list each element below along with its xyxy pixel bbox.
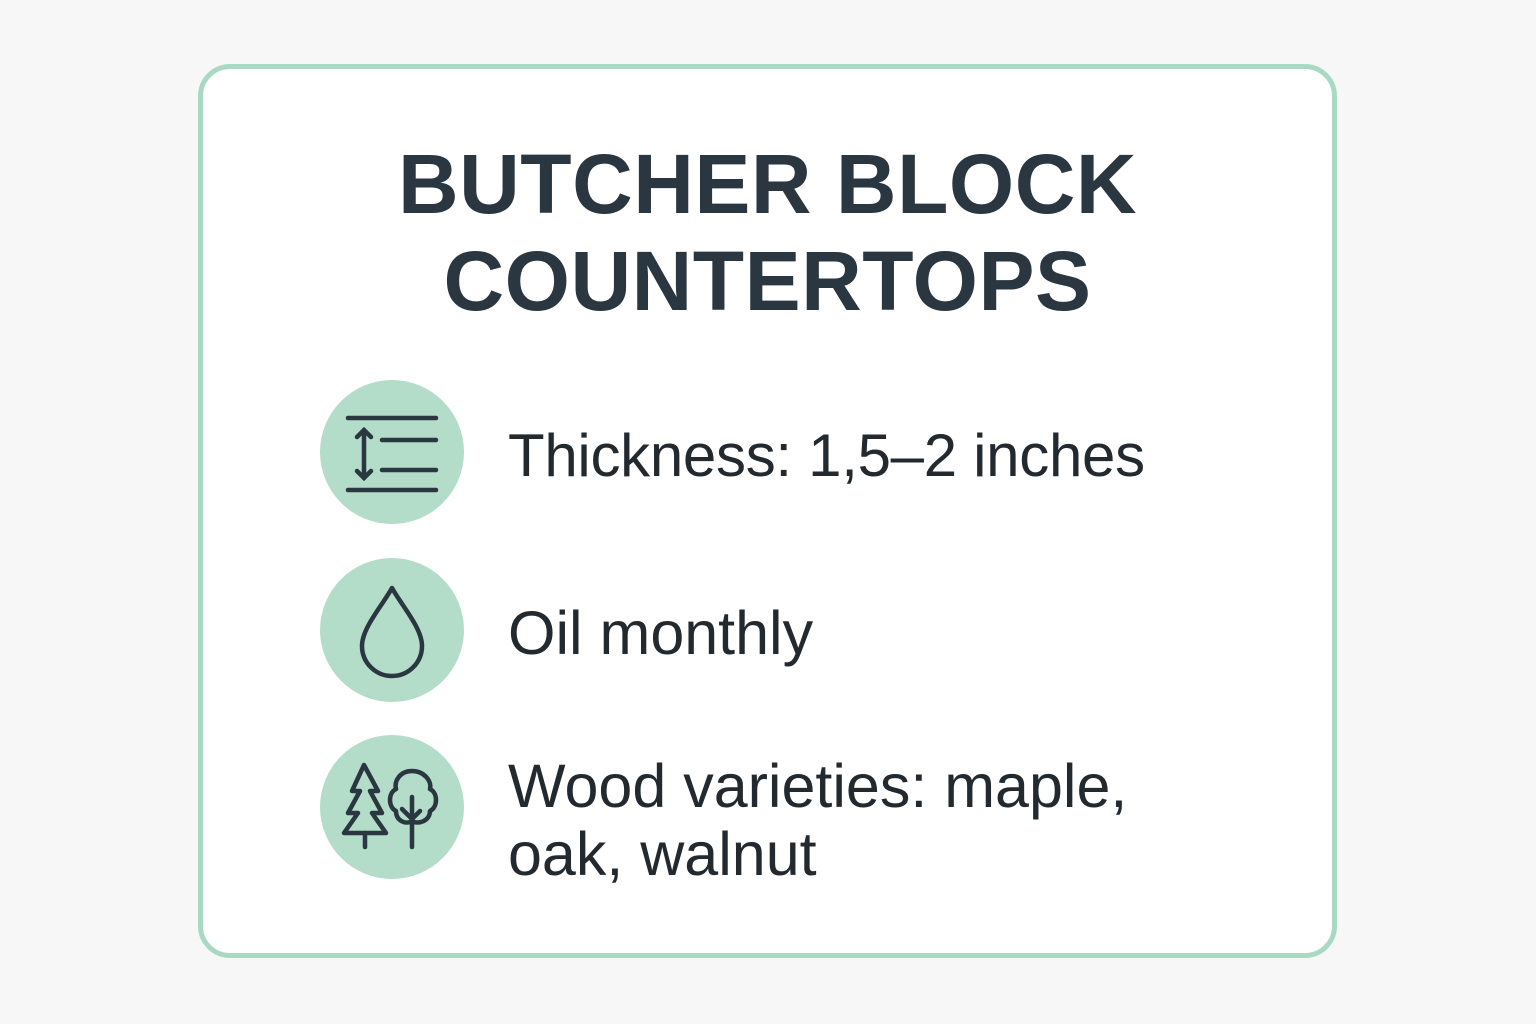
text: wood varieties [508, 752, 1127, 888]
icon: trees [320, 735, 464, 879]
card panel [198, 64, 1337, 958]
text: wood varieties: oak, walnut [508, 820, 817, 888]
text: wood varieties: Wood varieties: maple, [508, 752, 1127, 820]
icon: thickness [320, 380, 464, 524]
text: oil: Oil monthly [508, 599, 813, 667]
text: thickness: Thickness: 1,5–2 inches [508, 422, 1145, 489]
title: BUTCHER BLOCK [398, 137, 1137, 231]
title [398, 137, 1137, 328]
icon: oil drop [320, 558, 464, 702]
title: COUNTERTOPS [443, 234, 1092, 328]
